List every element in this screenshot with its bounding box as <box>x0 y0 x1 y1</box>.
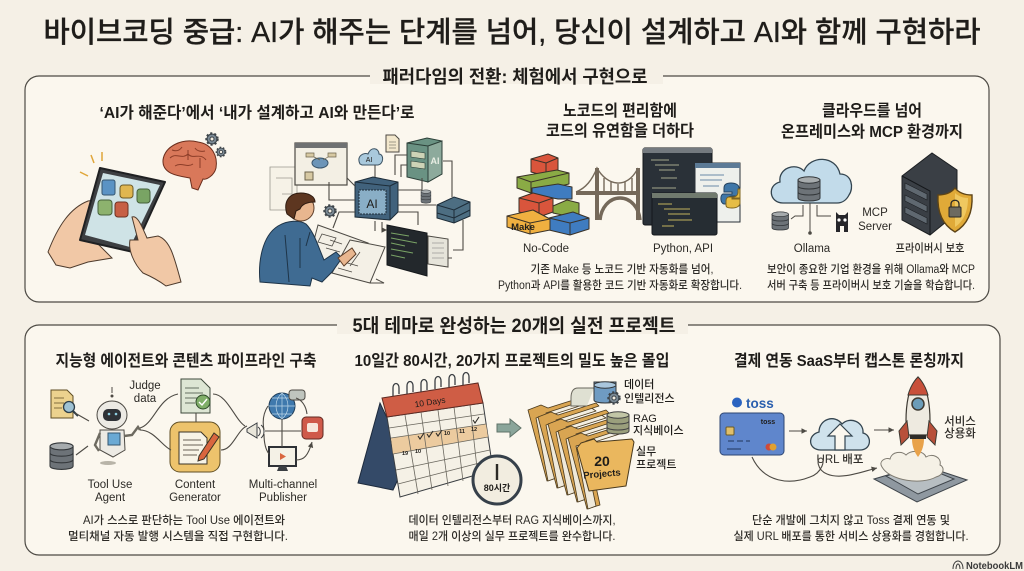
icon: monitor <box>269 447 296 471</box>
icon: database <box>50 443 73 469</box>
subheading: no-code plus code: 노코드의 편리함에 <box>563 102 677 120</box>
icon: calendar: 10 Days <box>414 395 446 409</box>
illustration: developer designing AI system: AI <box>430 156 440 166</box>
arrow: card to launch <box>752 457 877 481</box>
label: privacy protection: 프라이버시 보호 <box>896 242 965 255</box>
icon: brain with gears <box>163 134 225 190</box>
label: service launch <box>944 415 976 440</box>
label: practical projects <box>636 445 676 471</box>
description: cloud: 서버 구축 등 프라이버시 보호 기술을 학습합니다. <box>767 278 975 292</box>
icon: cloud database ollama <box>771 159 852 235</box>
label: MCP server: MCP <box>862 207 888 219</box>
icon: launch platform and smoke <box>874 451 967 502</box>
panel: 20 projects <box>25 315 1000 555</box>
label: data intelligence: 데이터 <box>624 377 654 391</box>
icon: deploy cloud <box>811 419 869 450</box>
icon: document check <box>181 379 210 413</box>
arrow: calendar to folders <box>497 419 521 437</box>
icon: globe and speech bubble <box>269 390 305 419</box>
description: 10 days <box>408 513 616 543</box>
labels: multi-channel publisher: Multi-channel <box>249 479 317 491</box>
description: payment <box>734 513 968 543</box>
illustration: developer designing AI system: AI <box>366 197 378 211</box>
icon: rocket <box>899 377 937 457</box>
labels: tool use agent: Agent <box>95 492 126 504</box>
description: no-code: 기존 Make 등 노코드 기반 자동화를 넘어, <box>530 263 714 276</box>
icon: hands holding tablet <box>48 152 181 286</box>
icon: content generator <box>170 422 220 472</box>
description: payment: 단순 개발에 그치지 않고 Toss 결제 연동 및 <box>752 513 950 527</box>
illustration: bridge <box>576 168 640 220</box>
icon: project folders: Projects <box>583 467 621 482</box>
label: practical projects: 프로젝트 <box>636 458 676 471</box>
icon: calendar: 12 <box>471 427 477 433</box>
heading: 20 projects: 5대 테마로 완성하는 20개의 실전 프로젝트 <box>352 315 676 337</box>
label: RAG knowledge base: RAG <box>633 413 657 425</box>
label: service launch: 상용화 <box>944 427 976 440</box>
label: data intelligence: 인텔리전스 <box>624 392 675 405</box>
arrow: card to cloud <box>789 430 807 432</box>
description: 10 days: 데이터 인텔리전스부터 RAG 지식베이스까지, <box>408 513 616 527</box>
logo: toss <box>732 396 774 411</box>
subheading: no-code plus code <box>546 102 694 140</box>
description: agents: 멀티채널 자동 발행 시스템을 직접 구현합니다. <box>68 529 288 543</box>
subheading: no-code plus code: 코드의 유연함을 더하다 <box>546 122 694 140</box>
labels: tool use agent: Tool Use <box>88 479 132 491</box>
icon: robot agent <box>95 387 140 465</box>
label: MCP server: Server <box>858 221 892 233</box>
icon: data intelligence database <box>571 382 620 406</box>
labels: multi-channel publisher <box>249 479 317 504</box>
label: data intelligence <box>624 377 675 405</box>
icon: toss card: toss <box>761 419 775 426</box>
icon: calendar: 10 <box>415 449 421 455</box>
icon: calendar: 19 <box>402 451 408 457</box>
icon: toss card <box>720 413 784 455</box>
illustration: lego bricks <box>507 154 589 235</box>
subheading: agents and content pipeline: 지능형 에이전트와 콘텐츠 파이프라인 구축 <box>56 352 317 370</box>
icon: RAG database <box>607 412 629 434</box>
icon: calendar: 11 <box>459 429 465 435</box>
label: no-code: No-Code <box>523 243 569 255</box>
labels: content generator: Content <box>175 479 216 491</box>
flow arrows <box>75 394 312 460</box>
subheading: cloud to on-premises <box>781 102 963 141</box>
arrow: cloud to rocket <box>874 429 894 431</box>
labels: content generator: Generator <box>169 492 221 504</box>
panel: paradigm shift <box>25 67 989 302</box>
subheading: cloud to on-premises: 클라우드를 넘어 <box>822 102 922 120</box>
icon: document search <box>51 390 78 418</box>
description: no-code <box>498 263 742 292</box>
labels: tool use agent <box>88 479 132 504</box>
description: payment: 실제 URL 배포를 통한 서비스 상용화를 경험합니다. <box>734 529 968 543</box>
subheading: AI does it: ‘AI가 해준다’에서 ‘내가 설계하고 AI와 만든다’로 <box>100 104 415 122</box>
label: judge data: data <box>134 393 157 405</box>
icon: 80 hour clock <box>473 456 521 504</box>
subheading: payment SaaS to capstone: 결제 연동 SaaS부터 캡스톤 론칭까지 <box>734 352 964 370</box>
subheading: 10 days 80 hours: 10일간 80시간, 20가지 프로젝트의 밀도 높은 몰입 <box>354 352 670 370</box>
label: RAG knowledge base: 지식베이스 <box>633 424 684 437</box>
icon: red app tile <box>302 417 323 439</box>
label: python api: Python, API <box>653 243 713 255</box>
illustration: code windows and python <box>643 148 740 235</box>
description: cloud: 보안이 종요한 기업 환경을 위해 Ollama와 MCP <box>767 263 975 276</box>
icon: megaphone <box>247 423 264 438</box>
title: 바이브코딩 중급: AI가 해주는 단계를 넘어, 당신이 설계하고 AI와 함께 구현하라 <box>44 16 980 49</box>
logo: toss: toss <box>746 396 774 411</box>
label: RAG knowledge base <box>633 413 684 437</box>
description: no-code: Python과 API를 활용한 코드 기반 자동화로 확장합니다. <box>498 278 742 292</box>
label: url deploy: URL 배포 <box>817 453 864 466</box>
icon: calendar <box>358 372 493 497</box>
heading: paradigm shift: 패러다임의 전환: 체험에서 구현으로 <box>382 67 648 87</box>
label: ollama: Ollama <box>794 243 831 255</box>
subheading: cloud to on-premises: 온프레미스와 MCP 환경까지 <box>781 123 963 141</box>
icon: 80 hour clock: 80시간 <box>484 483 511 493</box>
label: MCP server <box>858 207 892 233</box>
illustration: developer designing AI system <box>260 135 470 286</box>
labels: multi-channel publisher: Publisher <box>259 492 307 504</box>
label: judge data: Judge <box>129 380 161 392</box>
label: service launch: 서비스 <box>944 415 976 428</box>
description: agents <box>68 514 288 543</box>
label: judge data <box>129 380 161 405</box>
icon: project folders: 20 <box>594 453 610 469</box>
illustration: developer designing AI system: AI <box>366 157 372 164</box>
labels: content generator <box>169 479 221 504</box>
illustration: lego bricks: Make <box>511 222 535 233</box>
icon: server with shield <box>902 153 972 235</box>
icon: project folders <box>528 396 634 509</box>
description: 10 days: 매일 2개 이상의 실무 프로젝트를 완수합니다. <box>408 529 616 543</box>
description: cloud <box>767 263 975 292</box>
icon: calendar: 10 <box>444 431 450 437</box>
label: practical projects: 실무 <box>636 445 656 458</box>
description: agents: AI가 스스로 판단하는 Tool Use 에이전트와 <box>83 514 285 527</box>
